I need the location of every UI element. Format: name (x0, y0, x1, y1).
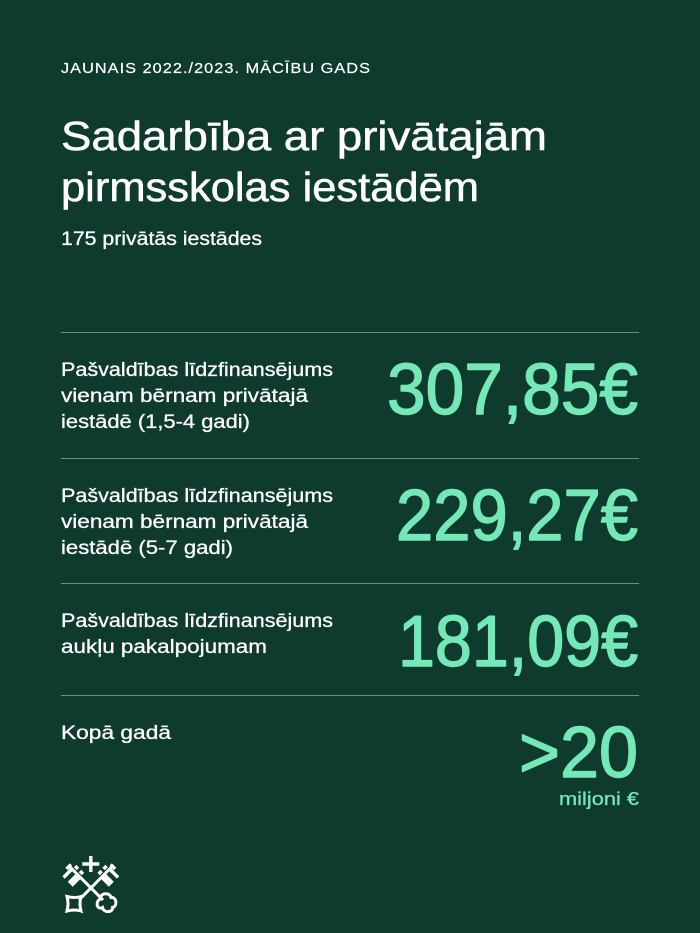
row 2 value: 229,27€ (396, 476, 638, 556)
title: pirmsskolas iestādēm (61, 164, 479, 210)
row 2 label: vienam bērnam privātajā (61, 512, 309, 533)
total value: >20 (519, 713, 638, 793)
row 3 value: 181,09€ (398, 602, 638, 682)
row 1 label: Pašvaldības līdzfinansējums (61, 360, 333, 381)
subtitle: 175 privātās iestādes (61, 229, 262, 250)
row 3 label (61, 611, 333, 658)
icon: crossed keys logo (64, 856, 118, 912)
row 1 label: iestādē (1,5-4 gadi) (61, 412, 250, 433)
total unit: miljoni € (559, 788, 640, 809)
row 3 label: aukļu pakalpojumam (61, 637, 267, 658)
row 2 label (61, 486, 333, 559)
row 2 label: Pašvaldības līdzfinansējums (61, 486, 333, 507)
title (61, 113, 547, 210)
row 1 value: 307,85€ (387, 350, 638, 430)
title: Sadarbība ar privātajām (61, 113, 547, 159)
total label: Kopā gadā (61, 723, 172, 744)
row 3 label: Pašvaldības līdzfinansējums (61, 611, 333, 632)
row 2 label: iestādē (5-7 gadi) (61, 538, 233, 559)
eyebrow: JAUNAIS 2022./2023. MĀCĪBU GADS (61, 61, 371, 77)
row 1 label: vienam bērnam privātajā (61, 386, 309, 407)
row 1 label (61, 360, 333, 433)
